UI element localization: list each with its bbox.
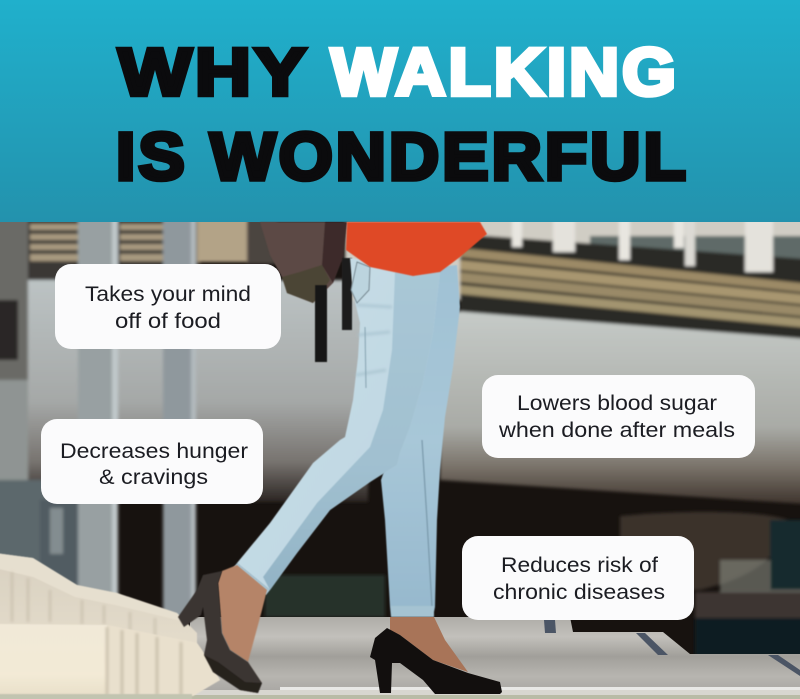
callout: takes your mind off of food bbox=[55, 264, 281, 349]
pillars bbox=[78, 200, 196, 620]
large grey structure left bbox=[28, 280, 368, 502]
callout: decreases hunger and cravings: & cravings bbox=[99, 465, 208, 489]
title: WALKING bbox=[331, 35, 679, 110]
callout: takes your mind off of food: Takes your mind bbox=[85, 282, 251, 306]
denim folds bbox=[356, 305, 392, 375]
callout: reduces risk of chronic diseases: chronic diseases bbox=[493, 580, 665, 604]
dark lens shape bbox=[620, 512, 788, 590]
shirt bbox=[346, 222, 487, 276]
callout: reduces risk of chronic diseases: Reduces risk of bbox=[501, 553, 658, 577]
raised shoe bbox=[178, 571, 262, 693]
standing shoe bbox=[370, 628, 502, 694]
callout: decreases hunger and cravings: Decreases hunger bbox=[60, 439, 248, 463]
upper left wall and slats bbox=[0, 200, 277, 282]
raised leg in light denim bbox=[233, 258, 440, 595]
floor bbox=[0, 617, 800, 699]
header band bbox=[0, 0, 800, 222]
mid-tone panel from thigh to ankle bbox=[263, 272, 440, 590]
right slatted roof bbox=[345, 200, 800, 347]
callout: lowers blood sugar: Lowers blood sugar bbox=[517, 391, 717, 415]
foliage glimpse bbox=[265, 575, 385, 617]
callout: lowers blood sugar: when done after meals bbox=[498, 418, 735, 442]
callout: takes your mind off of food: off of food bbox=[115, 309, 221, 333]
photo background: blurred station architecture bbox=[0, 200, 800, 699]
far left column bbox=[0, 200, 78, 590]
title: WHY bbox=[118, 35, 310, 110]
grey structure right bbox=[440, 310, 800, 505]
cuff bbox=[233, 563, 270, 595]
standing foot bbox=[390, 617, 468, 672]
standing leg in denim bbox=[381, 265, 460, 617]
callout: lowers blood sugar bbox=[482, 375, 755, 458]
raised foot bbox=[218, 565, 267, 662]
backpack bbox=[260, 222, 352, 362]
stairs bbox=[0, 553, 220, 699]
title bbox=[116, 35, 689, 194]
title: IS WONDERFUL bbox=[116, 120, 689, 194]
callout: decreases hunger and cravings bbox=[41, 419, 263, 504]
pocket bbox=[351, 262, 370, 303]
callout: reduces risk of chronic diseases bbox=[462, 536, 694, 620]
